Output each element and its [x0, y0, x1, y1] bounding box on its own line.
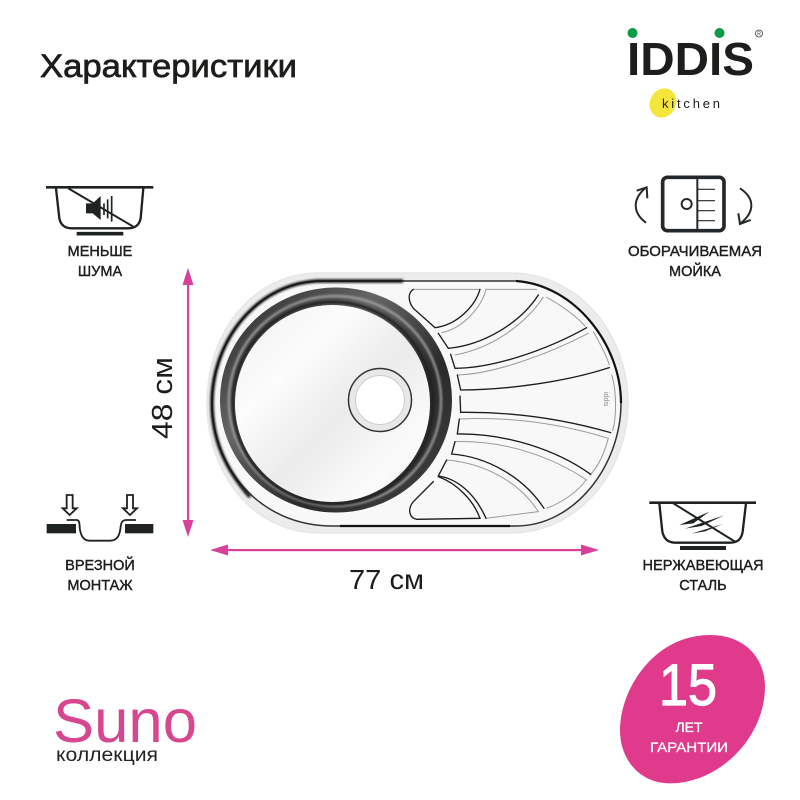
label: stainless steel: НЕРЖАВЕЮЩАЯ: [642, 558, 764, 574]
bowl floor: [235, 305, 430, 502]
logo: IDDIS kitchen: kitchen: [662, 96, 720, 111]
warranty badge: ГАРАНТИИ: [650, 739, 728, 755]
label: less noise: ШУМА: [78, 264, 122, 280]
logo: IDDIS kitchen: IDDIS: [627, 33, 754, 85]
label: reversible sink: МОЙКА: [669, 262, 721, 280]
collection label: коллекция: [56, 745, 158, 766]
icon: stainless steel: [649, 503, 756, 548]
width label: 77 см: [349, 564, 424, 595]
icon: less noise: [46, 187, 153, 234]
sink: [207, 273, 628, 533]
icon: drop-in mounting: [47, 495, 153, 541]
logo: IDDIS kitchen: R: [757, 32, 761, 38]
label: reversible sink: ОБОРАЧИВАЕМАЯ: [628, 244, 762, 260]
sink rim line: [212, 281, 621, 526]
height label: 48 см: [147, 357, 179, 439]
drain: [348, 368, 412, 432]
icon: reversible sink: [636, 177, 751, 231]
sink body: [207, 273, 628, 533]
collection name: Suno: [53, 687, 197, 755]
bowl wall: [220, 288, 452, 512]
stamp: iddis: [602, 392, 609, 407]
logo: IDDIS kitchen: [624, 28, 762, 122]
label: stainless steel: СТАЛЬ: [679, 578, 727, 594]
title: Характеристики: [40, 48, 297, 84]
width arrow: [210, 544, 599, 556]
warranty badge: ЛЕТ: [675, 719, 703, 735]
drainboard grooves: [409, 289, 616, 519]
label: drop-in mounting: МОНТАЖ: [67, 578, 133, 594]
label: less noise: МЕНЬШЕ: [68, 244, 133, 260]
warranty badge: 15: [659, 653, 717, 718]
height arrow: [182, 268, 194, 537]
label: drop-in mounting: ВРЕЗНОЙ: [65, 556, 135, 574]
warranty badge: [620, 635, 765, 783]
